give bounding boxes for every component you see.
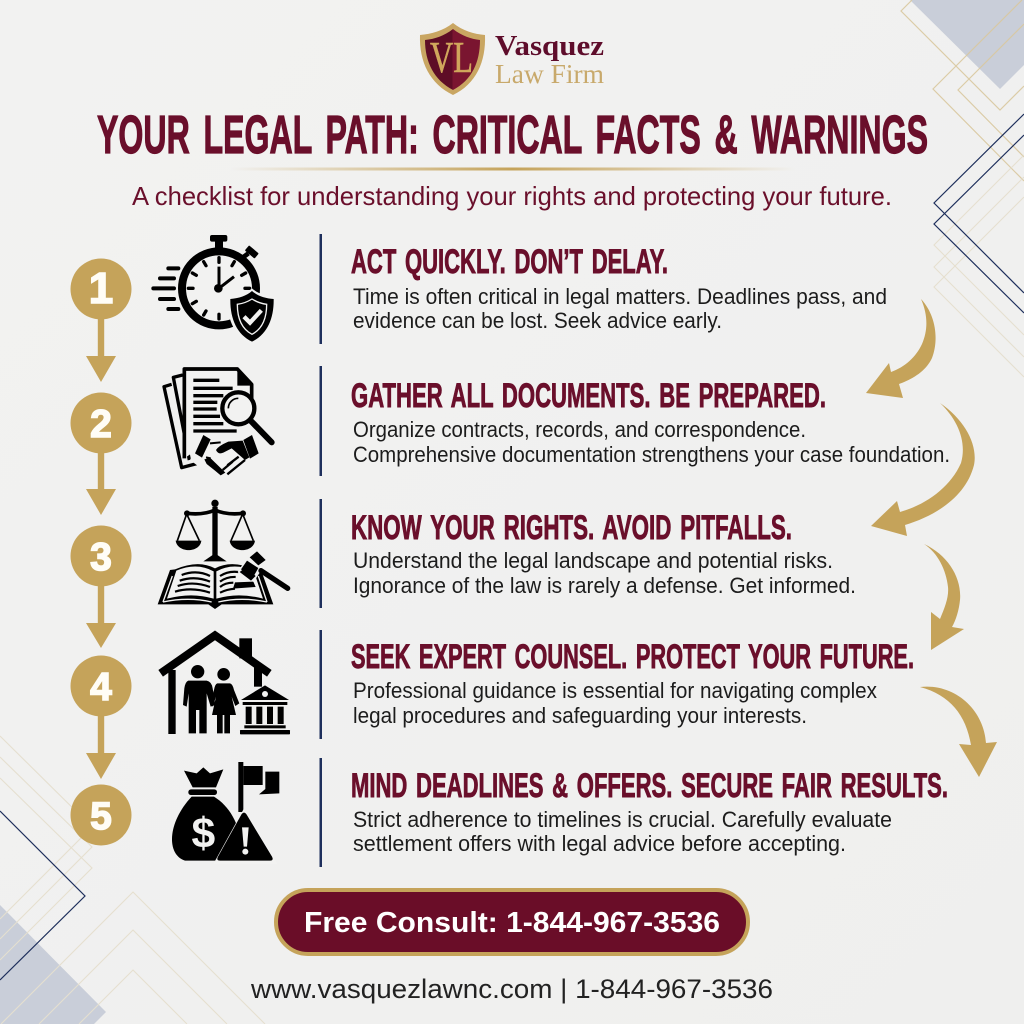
body text: evidence can be lost. Seek advice early. (353, 308, 722, 333)
heading: ACT QUICKLY. DON’T DELAY. (351, 243, 668, 281)
number 1: 1 (89, 264, 113, 313)
icon: shield: VL (430, 33, 473, 82)
body text: Ignorance of the law is rarely a defense. Get informed. (353, 573, 856, 598)
logo: Vasquez Law Firm (420, 23, 604, 95)
body text: Time is often critical in legal matters. Deadlines pass, and (353, 284, 887, 309)
arrow: curved 2 (871, 403, 975, 536)
number 5: 5 (90, 795, 112, 838)
body text: Comprehensive documentation strengthens your case foundation. (353, 442, 950, 467)
heading: KNOW YOUR RIGHTS. AVOID PITFALLS. (351, 509, 792, 547)
arrow: 4 to 5 (86, 712, 116, 779)
icon: money bag, flag and warning triangle (172, 762, 279, 864)
body text: Professional guidance is essential for navigating complex (353, 678, 877, 703)
arrow: curved 4 (920, 687, 997, 777)
body text (353, 807, 892, 856)
number 5 (70, 784, 132, 846)
icon: shield (420, 23, 485, 95)
number 2 (70, 392, 132, 454)
subtitle: A checklist for understanding your rights and protecting your future. (132, 181, 892, 211)
number 3: 3 (90, 536, 112, 579)
icon: house, family and courthouse (161, 635, 290, 734)
body text (353, 417, 950, 467)
decoration: top right geometric lines (901, 0, 1024, 377)
step 4 (320, 630, 914, 739)
step 2 (320, 366, 950, 476)
call to action button: Free Consult: 1-844-967-3536 (304, 907, 720, 939)
icon: documents, magnifier and handshake (164, 369, 272, 478)
icon: scales, law book and gavel (158, 500, 288, 609)
body text: settlement offers with legal advice before accepting. (353, 831, 846, 856)
arrow: curved 3 (924, 544, 964, 650)
body text: Understand the legal landscape and potential risks. (353, 548, 833, 573)
number 4 (70, 656, 132, 716)
brand descriptor: Law Firm (495, 59, 604, 89)
step 1 (320, 234, 887, 344)
call to action button (276, 890, 748, 954)
body text (353, 548, 856, 598)
brand name: Vasquez (495, 30, 604, 62)
number 1 (70, 258, 132, 320)
body text: Organize contracts, records, and correspondence. (353, 417, 806, 442)
number 2: 2 (90, 403, 112, 446)
decoration: bottom left geometric lines (0, 736, 265, 1024)
arrow: 3 to 4 (86, 582, 116, 648)
icon: money bag, flag and warning triangle: $ (191, 809, 215, 857)
icon: stopwatch with shield (153, 235, 277, 345)
footer contact line: www.vasquezlawnc.com | 1-844-967-3536 (250, 974, 773, 1004)
numbered timeline (70, 258, 132, 846)
body text (353, 284, 887, 333)
step 3 (320, 499, 856, 608)
title rule (230, 168, 795, 170)
number 4: 4 (90, 666, 112, 709)
body text (353, 678, 877, 728)
arrow: 1 to 2 (86, 315, 116, 382)
arrow: 2 to 3 (86, 450, 116, 515)
step 5 (320, 758, 948, 867)
body text: legal procedures and safeguarding your interests. (353, 703, 807, 728)
arrow: curved 1 (866, 299, 936, 398)
number 3 (70, 526, 132, 586)
body text: Strict adherence to timelines is crucial. Carefully evaluate (353, 807, 892, 832)
